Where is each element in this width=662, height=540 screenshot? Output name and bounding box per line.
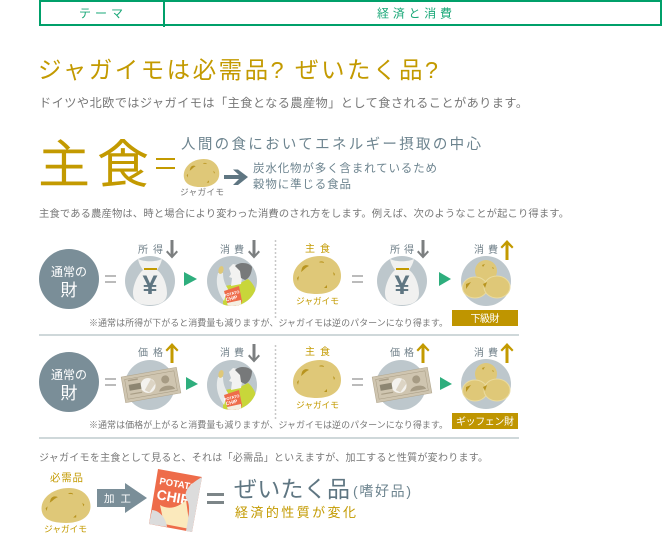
tag: Giffen good: ギッフェン財: [456, 415, 514, 428]
potato label: ジャガイモ: [296, 296, 339, 306]
note: ※通常は価格が上がると消費量も減りますが、ジャガイモは逆のパターンになり得ます。: [89, 419, 448, 430]
green arrow: [440, 377, 452, 390]
potato label: ジャガイモ: [296, 400, 339, 410]
equals: [207, 493, 224, 504]
icon: money bag: [125, 256, 175, 306]
equals: [105, 378, 116, 386]
icon: potato: [42, 488, 90, 523]
icon: money bag: ¥: [142, 270, 158, 300]
equals: [105, 275, 116, 283]
explanatory text: 主食である農産物は、時と場合により変わった消費のされ方をします。例えば、次のようなことが起こり得ます。: [39, 207, 569, 220]
icon: potatoes: [461, 256, 511, 306]
luxury sub-label: (嗜好品): [353, 483, 411, 499]
consumption down label: [220, 240, 260, 258]
normal goods badge: 財: [60, 281, 78, 300]
closing text: ジャガイモを主食として見ると、それは「必需品」といえますが、加工すると性質が変わります。: [39, 451, 488, 464]
normal goods badge: [39, 352, 99, 412]
tag: inferior good: 下級財: [470, 312, 500, 325]
note: ※通常は所得が下がると消費量も減りますが、ジャガイモは逆のパターンになり得ます。: [89, 317, 448, 328]
income down label: [390, 240, 429, 258]
potato label: ジャガイモ: [180, 187, 224, 197]
staple label: 主食: [305, 346, 330, 358]
consumption down label: 消費: [220, 243, 244, 256]
price up label: [138, 343, 178, 363]
icon: person eating chips: [207, 360, 257, 410]
icon: banknote: [372, 360, 432, 410]
icon: potato: [293, 360, 341, 398]
icon: chips bag: [149, 469, 202, 532]
big heading: staple food: 主食: [38, 137, 149, 195]
icon: person eating chips: [207, 256, 257, 306]
icon: potato: [184, 159, 219, 187]
income down label: [138, 240, 178, 258]
panel: price row: [39, 343, 518, 430]
income down label: 所得: [138, 243, 163, 256]
icon: chips bag: CHIP: [155, 486, 191, 508]
intro text: ドイツや北欧ではジャガイモは「主食となる農産物」として食されることがあります。: [39, 95, 528, 110]
icon: person eating chips: CHIP: [225, 294, 239, 303]
normal goods badge: [39, 249, 99, 309]
price up label: 価格: [390, 346, 414, 359]
luxury heading: ぜいたく品: [234, 476, 350, 502]
equals: [352, 275, 363, 283]
description: 炭水化物が多く含まれているため: [253, 161, 437, 175]
consumption up label: [474, 343, 514, 363]
equals: [352, 378, 363, 386]
price up label: [390, 343, 430, 363]
consumption down label: 消費: [220, 346, 244, 359]
normal goods badge: 通常の: [51, 265, 87, 279]
header table: theme: [40, 1, 661, 27]
icon: potato: [293, 256, 341, 294]
icon: potatoes: [461, 359, 511, 409]
staple food definition: [38, 136, 482, 197]
processing arrow: [97, 483, 147, 513]
potato label: ジャガイモ: [44, 524, 87, 534]
green arrow: [186, 377, 198, 390]
panel: income row: [39, 240, 518, 328]
icon: chips bag: POTATO: [158, 476, 198, 494]
income down label: 所得: [390, 243, 414, 256]
icon: person eating chips: CHIP: [225, 398, 239, 407]
green arrow: [184, 272, 197, 286]
staple food definition: 穀物に準じる食品: [253, 177, 351, 191]
equals sign: [156, 158, 175, 169]
icon: person eating chips: POTATO: [223, 393, 240, 402]
staple label: 主食: [305, 243, 330, 255]
tag: inferior good: [452, 310, 518, 326]
green arrow: [439, 272, 451, 286]
consumption up label: 消費: [474, 243, 498, 256]
arrow: [224, 170, 248, 185]
price up label: 価格: [138, 346, 163, 359]
economic nature text: 経済的性質が変化: [235, 505, 356, 520]
consumption up label: [474, 240, 514, 260]
icon: banknote: [121, 360, 181, 410]
tag: Giffen good: [452, 413, 518, 429]
title: ジャガイモは必需品? ぜいたく品?: [38, 57, 438, 83]
processing arrow: 加工: [104, 493, 131, 505]
header table: theme: 経済と消費: [377, 6, 452, 20]
icon: person eating chips: POTATO: [223, 289, 240, 298]
definition heading: 人間の食においてエネルギー摂取の中心: [181, 136, 482, 153]
normal goods badge: 通常の: [51, 368, 87, 382]
necessity label: 必需品: [50, 471, 83, 484]
panel: processing conclusion: [42, 469, 411, 534]
icon: money bag: [377, 256, 427, 306]
normal goods badge: 財: [60, 384, 78, 403]
consumption up label: 消費: [474, 346, 498, 359]
consumption down label: [220, 344, 260, 362]
header table: theme: テーマ: [79, 6, 123, 20]
icon: money bag: ¥: [394, 270, 410, 300]
